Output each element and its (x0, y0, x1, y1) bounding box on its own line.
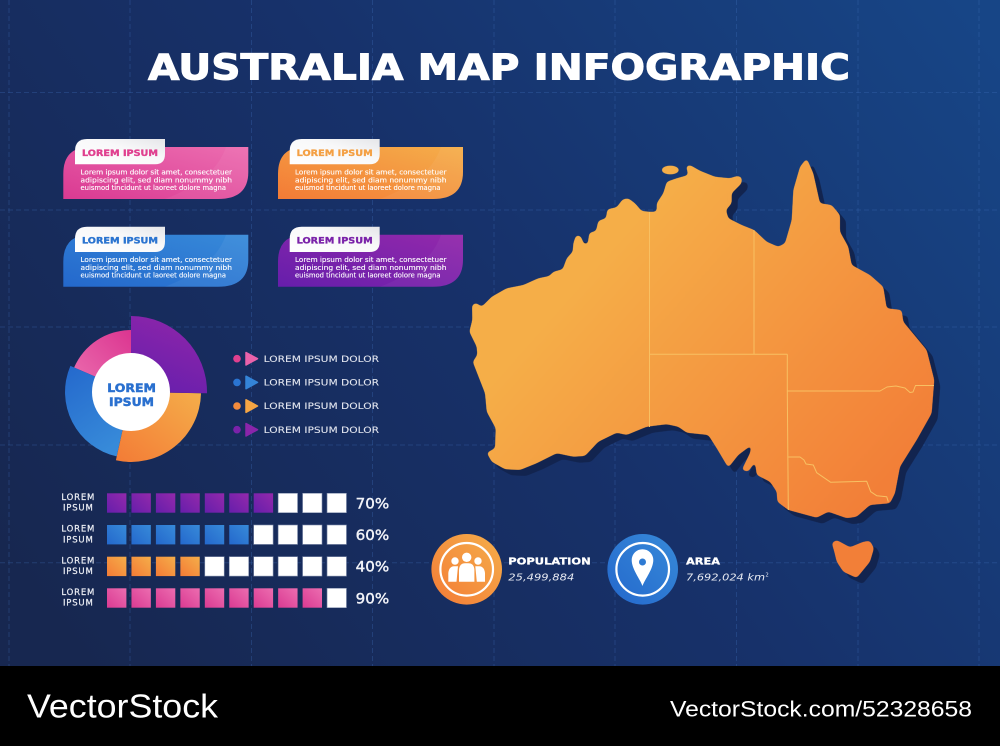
panel: pink card: euismod tincidunt ut laoreet dolore magna (80, 184, 226, 192)
stat: area: AREA (686, 556, 721, 568)
row: 90%: IPSUM (63, 599, 94, 609)
row: 90%: LOREM (61, 588, 95, 598)
map landmass (469, 158, 934, 578)
stat: area: 7,692,024 km (686, 572, 765, 583)
row: 70%: 70% (356, 496, 389, 512)
panel: blue card: euismod tincidunt ut laoreet dolore magna (80, 272, 226, 280)
row: 40%: IPSUM (63, 567, 94, 577)
panel: blue card (63, 227, 248, 287)
state borders (650, 212, 934, 510)
pie chart: LOREM (107, 381, 156, 395)
panel: purple card: adipiscing elit, sed diam nonummy nibh (295, 264, 446, 272)
pie chart (65, 316, 207, 462)
row: 60% (61, 525, 389, 545)
row: 40%: 40% (356, 560, 389, 576)
stat: area: 2 (766, 572, 769, 578)
legend: LOREM IPSUM DOLOR (264, 426, 379, 436)
panel: orange card: euismod tincidunt ut laoreet dolore magna (295, 184, 440, 192)
row: 60%: LOREM (61, 525, 95, 535)
panel: purple card: LOREM IPSUM (297, 237, 373, 247)
map shadow (475, 164, 940, 584)
legend: LOREM IPSUM DOLOR (264, 402, 379, 412)
panel: purple card: euismod tincidunt ut laoreet dolore magna (295, 272, 440, 280)
row: 60%: 60% (356, 528, 389, 544)
panel: purple card: Lorem ipsum dolor sit amet, consectetuer (295, 256, 447, 264)
panel: orange card: Lorem ipsum dolor sit amet, consectetuer (295, 168, 447, 176)
stat: area (607, 534, 769, 605)
icon: location pin (607, 534, 678, 605)
panel: blue card: Lorem ipsum dolor sit amet, consectetuer (80, 256, 232, 264)
stat: population: 25,499,884 (508, 572, 574, 583)
progress bars (61, 493, 389, 609)
panel: blue card: adipiscing elit, sed diam nonummy nibh (80, 264, 232, 272)
footer bar: VectorStock.com/52328658 (670, 697, 972, 722)
legend: LOREM IPSUM DOLOR (264, 355, 379, 365)
stat: population: POPULATION (508, 556, 591, 568)
panel: pink card (63, 139, 248, 199)
map: Australia (469, 158, 940, 584)
row: 70% (61, 493, 389, 514)
row: 40%: LOREM (61, 556, 95, 566)
legend (233, 352, 379, 436)
panel: pink card: LOREM IPSUM (82, 149, 158, 159)
panel: orange card: LOREM IPSUM (297, 149, 373, 159)
pie chart: IPSUM (109, 395, 154, 409)
panel: orange card (278, 139, 463, 199)
footer bar: VectorStock (27, 687, 219, 724)
row: 60%: IPSUM (63, 535, 94, 545)
icon: people (431, 534, 502, 605)
row: 90%: 90% (356, 591, 389, 607)
legend: LOREM IPSUM DOLOR (264, 379, 379, 389)
panel: pink card: Lorem ipsum dolor sit amet, consectetuer (80, 168, 232, 176)
panel: blue card: LOREM IPSUM (82, 237, 158, 247)
panel: orange card: adipiscing elit, sed diam nonummy nibh (295, 176, 446, 184)
title: AUSTRALIA MAP INFOGRAPHIC (148, 47, 850, 88)
panel: pink card: adipiscing elit, sed diam nonummy nibh (80, 176, 232, 184)
row: 40% (61, 556, 389, 577)
stat: population (431, 534, 591, 605)
footer bar (0, 666, 1000, 746)
row: 70%: IPSUM (63, 504, 94, 514)
row: 70%: LOREM (61, 493, 95, 503)
panel: purple card (278, 227, 463, 287)
row: 90% (61, 588, 389, 609)
